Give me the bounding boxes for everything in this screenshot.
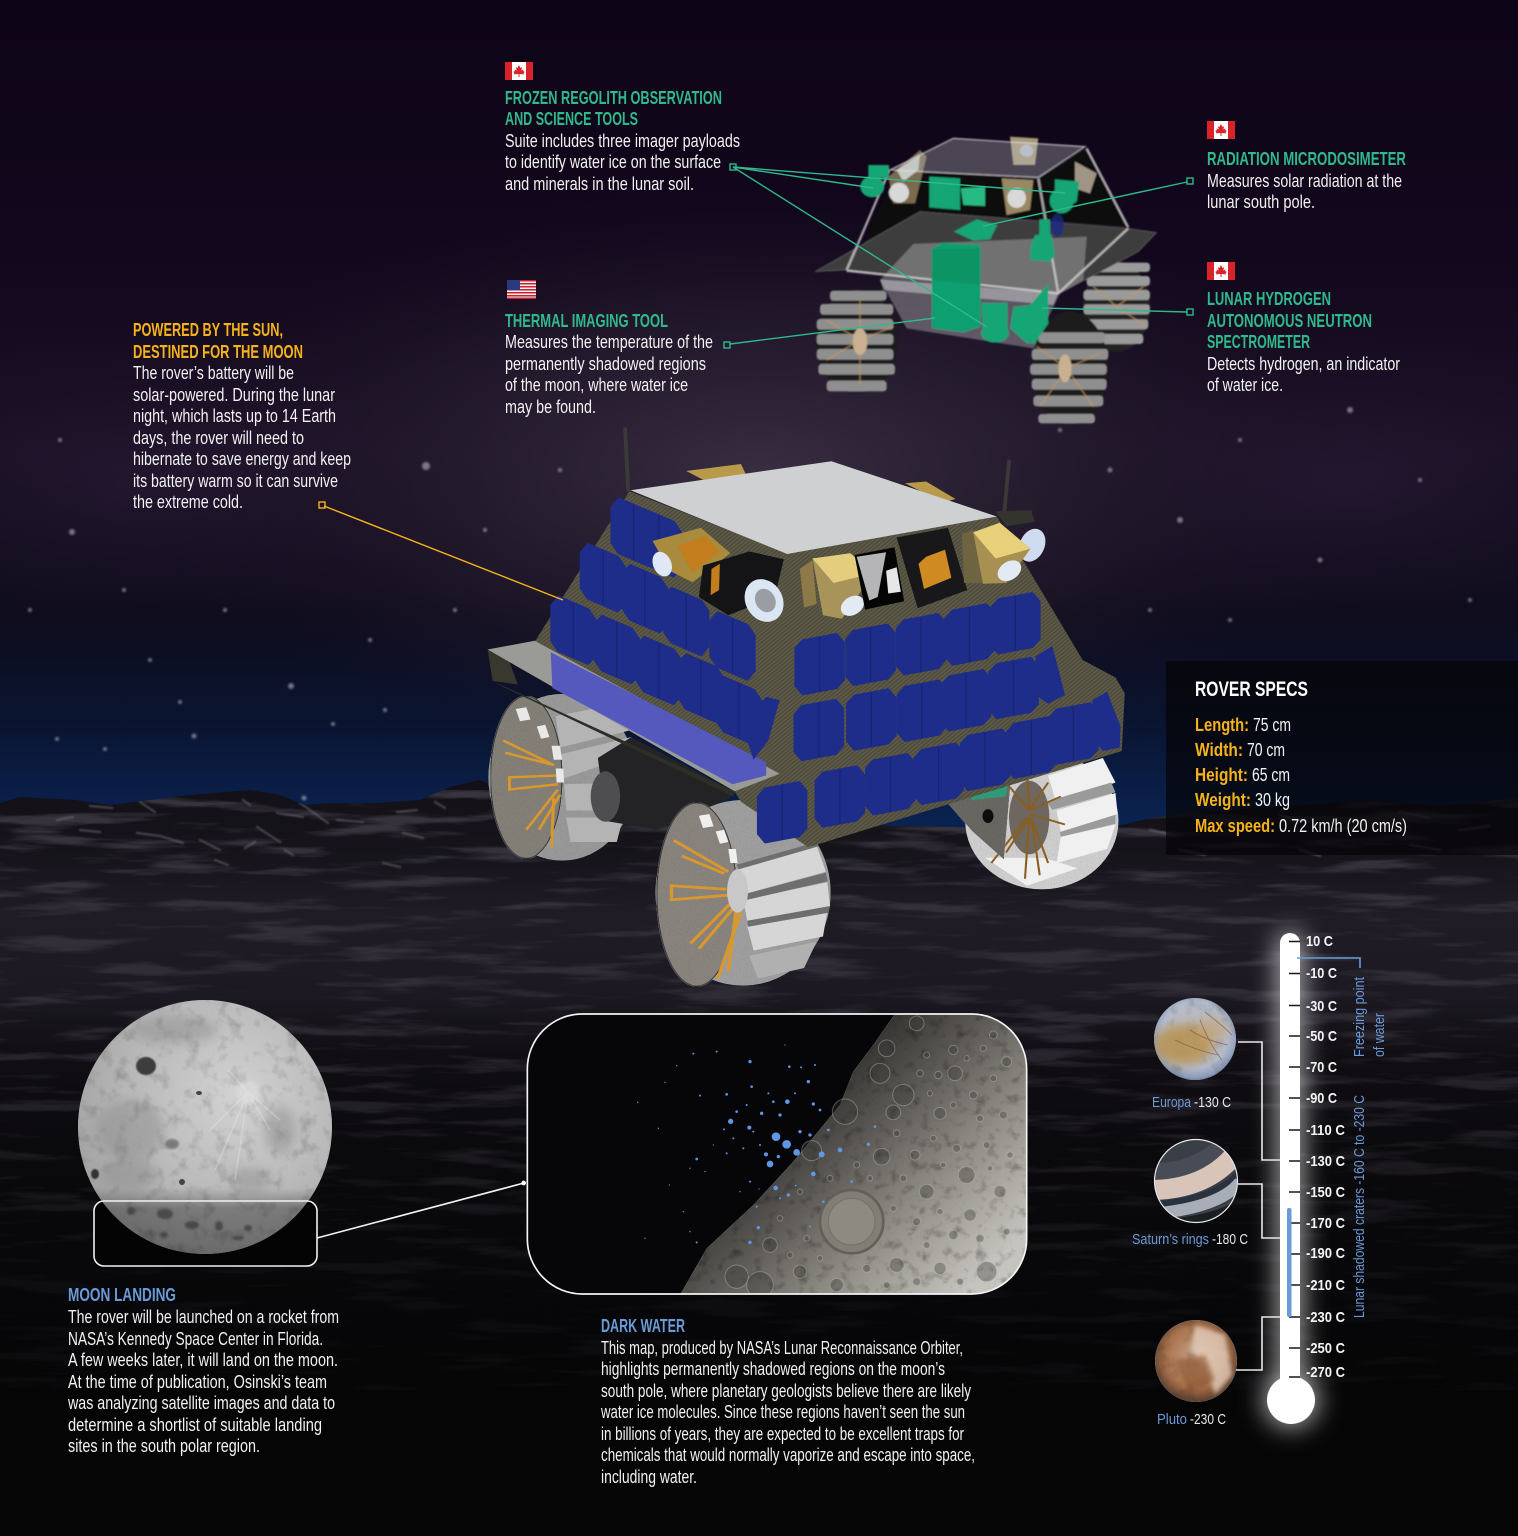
body: highlights permanently shadowed regions on the moon’s	[601, 1359, 945, 1379]
scale labels: -270 C	[1306, 1364, 1345, 1381]
Europa label	[1152, 1094, 1231, 1111]
imager payload leaders	[730, 164, 1065, 327]
moon grey mare patches	[96, 1016, 296, 1192]
scale labels: -50 C	[1306, 1028, 1337, 1045]
lunar terrain and mountains	[0, 770, 1518, 1536]
rover specs list: Height:	[1195, 765, 1248, 785]
body: hibernate to save energy and keep	[133, 449, 351, 469]
rear left wheel	[488, 694, 636, 861]
body: At the time of publication, Osinski’s team	[68, 1372, 327, 1392]
thermometer glow	[1264, 931, 1318, 1427]
neutron spectrometer leader	[1042, 308, 1193, 315]
body: sites in the south polar region.	[68, 1436, 260, 1456]
freezing point label	[1351, 976, 1388, 1057]
text: powered by the sun	[133, 320, 351, 512]
flag: Canada, regolith tools	[505, 62, 533, 80]
solar panels right face	[758, 593, 1121, 842]
heading: MOON LANDING	[68, 1285, 176, 1305]
flag: Canada, radiation	[1207, 121, 1235, 139]
body: NASA’s Kennedy Space Center in Florida.	[68, 1329, 323, 1349]
body	[1207, 171, 1402, 212]
body: This map, produced by NASA’s Lunar Reconnaissance Orbiter,	[601, 1338, 963, 1358]
body: of water ice.	[1207, 375, 1283, 395]
body: night, which lasts up to 14 Earth	[133, 406, 336, 426]
craters	[725, 1016, 1013, 1298]
thermometer chart	[1264, 931, 1388, 1427]
planet: Europa	[1152, 998, 1236, 1111]
body: Suite includes three imager payloads	[505, 131, 740, 151]
solar panels left face	[552, 499, 780, 760]
text: radiation microdosimeter	[1207, 149, 1406, 212]
body: in billions of years, they are expected to be excellent traps for	[601, 1424, 964, 1444]
body: Measures the temperature of the	[505, 332, 713, 352]
heading	[133, 320, 303, 362]
scale labels: -10 C	[1306, 965, 1337, 982]
gold cameras ghosted	[888, 137, 1097, 215]
gold box behind top plate	[686, 464, 956, 502]
scale labels: -150 C	[1306, 1184, 1345, 1201]
rover specs list: 75 cm	[1253, 715, 1291, 735]
scale labels: -110 C	[1306, 1122, 1345, 1139]
stars	[28, 407, 1472, 800]
right flange	[996, 510, 1035, 526]
left gold camera	[649, 528, 730, 582]
body	[505, 332, 713, 417]
text: dark water	[600, 1316, 975, 1487]
heading	[505, 88, 722, 129]
scale labels: -70 C	[1306, 1059, 1337, 1076]
rover specs list: Weight:	[1195, 790, 1251, 810]
rover specs title: ROVER SPECS	[1195, 678, 1308, 701]
right gold camera	[962, 523, 1050, 585]
mountain snow flecks	[57, 800, 1490, 867]
heading: AND SCIENCE TOOLS	[505, 109, 638, 129]
body: permanently shadowed regions	[505, 354, 706, 374]
moon zoom box and connector	[94, 1183, 524, 1266]
side shelf	[488, 641, 780, 796]
centre gold camera	[800, 553, 873, 620]
flag: USA, thermal imaging	[507, 280, 536, 299]
rover specs list	[1195, 715, 1407, 836]
body: Measures solar radiation at the	[1207, 171, 1402, 191]
body: of the moon, where water ice	[505, 375, 688, 395]
heading: RADIATION MICRODOSIMETER	[1207, 149, 1406, 169]
text: lunar hydrogen spectrometer	[1207, 289, 1400, 395]
heading: DARK WATER	[601, 1316, 685, 1336]
translucent frame	[847, 148, 1128, 293]
main rover illustration	[488, 429, 1125, 986]
green instruments	[860, 165, 1079, 343]
planet: Saturn's rings	[1132, 1130, 1248, 1248]
map frame	[527, 1014, 1027, 1294]
freezing point label: Freezing point	[1351, 976, 1368, 1057]
scale labels: -30 C	[1306, 998, 1337, 1015]
body: Detects hydrogen, an indicator	[1207, 354, 1400, 374]
radiation leader	[983, 178, 1193, 226]
translucent top plate	[890, 138, 1085, 177]
heading: FROZEN REGOLITH OBSERVATION	[505, 88, 722, 108]
top plate	[631, 461, 997, 554]
body: the extreme cold.	[133, 492, 243, 512]
scale labels: -250 C	[1306, 1340, 1345, 1357]
body	[1207, 354, 1400, 395]
body: south pole, where planetary geologists believe there are likely	[601, 1381, 971, 1401]
body	[67, 1307, 339, 1456]
scale labels	[1306, 933, 1345, 1381]
text: frozen regolith tools	[505, 88, 740, 194]
body: water ice molecules. Since these regions haven’t seen the sun	[600, 1402, 965, 1422]
rover underbody	[591, 737, 1010, 860]
scale labels: 10 C	[1306, 933, 1333, 950]
dark inner cavity	[863, 148, 1127, 243]
text: moon landing	[67, 1285, 339, 1456]
blue sensor	[1051, 214, 1064, 236]
body	[600, 1338, 975, 1487]
body: and minerals in the lunar soil.	[505, 174, 694, 194]
Pluto label: -230 C	[1190, 1411, 1226, 1428]
lunar crater range bar	[1287, 1208, 1292, 1317]
text: thermal imaging tool	[505, 311, 713, 417]
Pluto label	[1157, 1411, 1226, 1428]
body: solar-powered. During the lunar	[133, 385, 335, 405]
heading: LUNAR HYDROGEN	[1207, 289, 1331, 309]
body	[133, 363, 351, 512]
rover detail: transparent cutaway rover	[815, 137, 1157, 425]
body: The rover will be launched on a rocket from	[68, 1307, 339, 1327]
scale labels: -210 C	[1306, 1277, 1345, 1294]
body: determine a shortlist of suitable landing	[68, 1415, 322, 1435]
translucent body	[880, 237, 1087, 348]
body: was analyzing satellite images and data to	[67, 1393, 335, 1413]
rear right wheel	[965, 753, 1118, 889]
imaging window	[855, 547, 904, 610]
thermal imaging leader	[724, 318, 935, 348]
connector dot	[521, 1181, 526, 1185]
body: its battery warm so it can survive	[133, 471, 338, 491]
body: including water.	[601, 1467, 697, 1487]
Pluto label: Pluto	[1157, 1411, 1187, 1428]
rover specs list: 30 kg	[1255, 790, 1290, 810]
front wheel	[655, 800, 831, 986]
antennas	[625, 429, 1009, 516]
Saturn's rings label: -180 C	[1212, 1231, 1248, 1248]
heading: POWERED BY THE SUN,	[133, 320, 283, 340]
body: chemicals that would normally vaporize and escape into space,	[601, 1445, 975, 1465]
freezing point label: of water	[1371, 1013, 1388, 1057]
heading	[1207, 289, 1372, 352]
rover specs list: 65 cm	[1252, 765, 1290, 785]
Europa label: -130 C	[1194, 1094, 1231, 1111]
body: may be found.	[505, 397, 596, 417]
body: A few weeks later, it will land on the moon.	[68, 1350, 338, 1370]
flag: Canada, neutron spectrometer	[1207, 262, 1235, 280]
scale labels: -230 C	[1306, 1309, 1345, 1326]
rover specs list: 0.72 km/h (20 cm/s)	[1279, 816, 1407, 836]
connector: Pluto	[1236, 1317, 1280, 1370]
scale labels: -190 C	[1306, 1245, 1345, 1262]
body: to identify water ice on the surface	[505, 152, 721, 172]
scale labels: -170 C	[1306, 1215, 1345, 1232]
body: lunar south pole.	[1207, 192, 1315, 212]
freezing point bracket	[1297, 958, 1360, 968]
planet: Pluto	[1155, 1320, 1237, 1428]
wheels of cutaway rover	[816, 262, 1150, 425]
translucent middle plate	[815, 212, 1157, 293]
Saturn's rings label: Saturn’s rings	[1132, 1231, 1209, 1248]
connector: Saturn	[1238, 1184, 1280, 1238]
moon image	[78, 1000, 332, 1254]
heading: THERMAL IMAGING TOOL	[505, 311, 668, 331]
body: The rover’s battery will be	[133, 363, 294, 383]
blue shadowed region dots	[637, 1044, 876, 1244]
rover specs list: Max speed:	[1195, 816, 1275, 836]
scale labels: -90 C	[1306, 1090, 1337, 1107]
thermometer body	[1267, 933, 1315, 1424]
rover specs list: Length:	[1195, 715, 1249, 735]
lunar craters label: Lunar shadowed craters -160 C to -230 C	[1351, 1095, 1368, 1318]
dark backdrop around moon inset box	[94, 1201, 317, 1266]
map: dark water south pole	[521, 1012, 1030, 1298]
body: days, the rover will need to	[133, 428, 304, 448]
large crater	[820, 1190, 883, 1253]
black square camera	[897, 528, 967, 608]
heading: AUTONOMOUS NEUTRON	[1207, 311, 1372, 331]
black camera housing	[699, 552, 789, 626]
scale labels: -130 C	[1306, 1153, 1345, 1170]
tick marks	[1289, 942, 1300, 1377]
leader lines	[319, 164, 1193, 600]
connector: Europa	[1238, 1042, 1280, 1160]
carbon body right face	[735, 516, 1125, 847]
panel: rover specs	[1166, 661, 1518, 855]
heading: SPECTROMETER	[1207, 332, 1310, 352]
rover specs list: Width:	[1195, 740, 1243, 760]
lit lunar surface	[680, 1012, 1030, 1298]
heading: DESTINED FOR THE MOON	[133, 342, 303, 362]
Europa label: Europa	[1152, 1094, 1192, 1111]
body	[505, 131, 740, 194]
rover specs list: 70 cm	[1247, 740, 1285, 760]
solar callout leader	[319, 502, 563, 600]
carbon body left face	[535, 491, 787, 791]
